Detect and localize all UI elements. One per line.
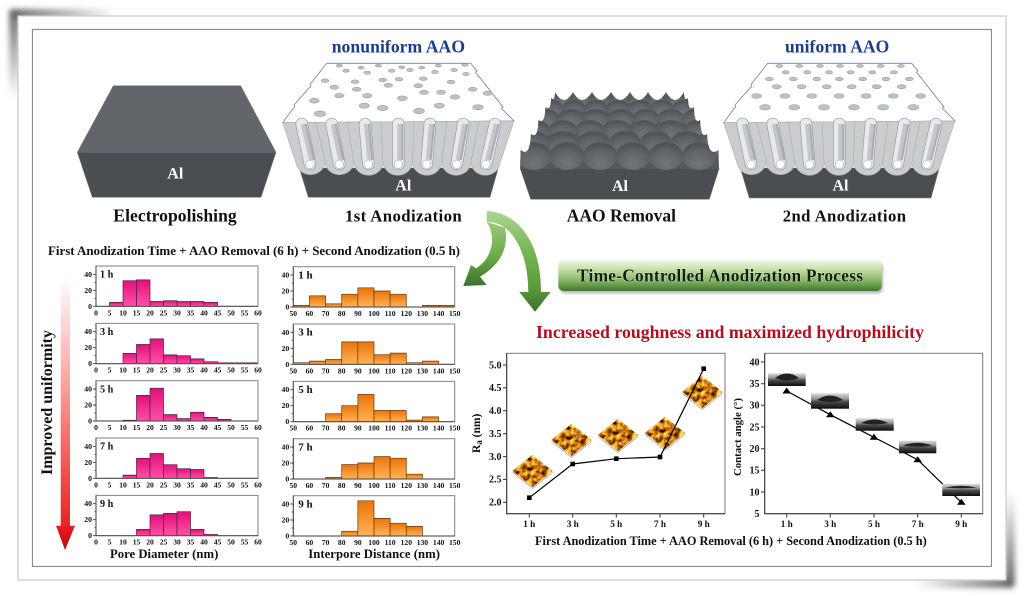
interpore distance histogram 7 h: 110: [385, 481, 396, 490]
interpore distance histogram 3 h: 90: [354, 366, 362, 375]
interpore distance histogram 3 h: 0: [285, 360, 289, 369]
pore diameter histogram 1 h: 40: [84, 270, 92, 279]
pore diameter histogram 9 h: 5: [108, 538, 112, 547]
line chart: contact angle: [732, 353, 983, 529]
pore diameter histogram 1 h: 35: [187, 308, 194, 317]
line chart: contact angle: 5 h: [868, 519, 880, 529]
line chart: contact angle: Contact angle (°): [732, 398, 744, 476]
interpore distance histogram 7 h: 100: [368, 481, 380, 490]
AFM surface images: [512, 376, 722, 488]
pore diameter histogram 5 h: 35: [187, 423, 194, 432]
interpore distance histogram 3 h: 40: [282, 328, 289, 337]
line chart: contact angle: 1 h: [781, 519, 793, 529]
interpore distance histogram 3 h: 70: [322, 366, 330, 375]
interpore distance histogram 3 h: 110: [385, 366, 396, 375]
pore diameter histogram 3 h: 20: [84, 343, 92, 352]
pore diameter histogram 7 h: 10: [119, 480, 127, 489]
interpore distance histogram 1 h: 90: [354, 309, 362, 318]
pore diameter histogram 7 h: 60: [254, 480, 262, 489]
pore diameter histogram 3 h: 15: [133, 366, 140, 375]
interpore distance histogram 9 h: 130: [417, 538, 428, 547]
interpore distance histogram 7 h: 70: [322, 481, 330, 490]
label: nonuniform AAO: nonuniform AAO: [332, 37, 465, 57]
pore diameter histogram 9 h: 55: [241, 538, 248, 547]
pore diameter histogram 7 h: 55: [241, 480, 248, 489]
water droplet images: [768, 373, 980, 496]
pore diameter histogram 1 h: 0: [88, 302, 92, 311]
interpore distance histogram 5 h: 90: [354, 424, 362, 433]
pore diameter histogram 9 h: 20: [146, 538, 154, 547]
pore diameter histogram 9 h: 25: [160, 538, 168, 547]
interpore distance histogram 5 h: 40: [282, 385, 289, 394]
line chart: roughness Ra: 1 h: [523, 519, 535, 529]
interpore distance histogram 1 h: 50: [290, 309, 297, 318]
pore diameter histogram 5 h: 0: [94, 423, 98, 432]
process banner: [558, 260, 883, 294]
pore diameter histogram 5 h: 30: [173, 423, 181, 432]
pore diameter histogram 5 h: 45: [214, 423, 222, 432]
block: second anodization uniform AAO: [724, 63, 955, 198]
line chart: roughness Ra: 2.5: [489, 475, 502, 486]
interpore distance histogram 3 h: 140: [433, 366, 444, 375]
pore diameter histogram 3 h: 50: [227, 366, 235, 375]
pore diameter histogram 3 h: 10: [119, 366, 127, 375]
pore diameter histogram 3 h: 3 h: [100, 327, 114, 338]
line chart: contact angle: 5: [754, 509, 760, 520]
pore diameter histogram 3 h: 30: [173, 366, 181, 375]
step label: AAO Removal: AAO Removal: [567, 206, 676, 226]
interpore distance histogram 5 h: 120: [401, 424, 412, 433]
histogram heading: First Anodization Time + AAO Removal (6 h) + Second Anodization (0.5 h): [48, 243, 460, 258]
line chart: roughness Ra: 9 h: [698, 519, 710, 529]
pore diameter histogram 1 h: 15: [133, 308, 140, 317]
line chart: roughness Ra: 3.5: [489, 429, 502, 440]
line chart: roughness Ra: R: [471, 445, 483, 453]
interpore distance histogram 9 h: 140: [433, 538, 444, 547]
line chart: roughness Ra: 4.5: [489, 383, 502, 394]
pore diameter histogram 3 h: 35: [187, 366, 194, 375]
pore diameter histogram 1 h: 0: [94, 308, 98, 317]
pore diameter histogram 1 h: 60: [254, 308, 262, 317]
interpore distance histogram 1 h: 20: [282, 286, 289, 296]
pore diameter histogram 1 h: 25: [160, 308, 168, 317]
interpore distance histogram 1 h: 1 h: [298, 269, 313, 281]
pore diameter histogram 7 h: 15: [133, 480, 140, 489]
pore diameter histogram 7 h: 20: [84, 458, 92, 467]
pore diameter histogram 5 h: 55: [241, 423, 248, 432]
pore diameter histogram 1 h: 40: [200, 308, 208, 317]
interpore distance histogram 1 h: 70: [322, 309, 330, 318]
interpore distance histogram 7 h: 0: [285, 474, 289, 484]
interpore distance histogram 7 h: 60: [306, 481, 313, 490]
interpore distance histogram 7 h: 20: [282, 458, 289, 468]
pore diameter histogram 5 h: [84, 381, 262, 432]
pore diameter histogram 7 h: 0: [94, 480, 98, 489]
pore diameter histogram 5 h: 25: [160, 423, 168, 432]
block: electropolished aluminium: [77, 86, 276, 197]
shared chart x-axis title: First Anodization Time + AAO Removal (6 h) + Second Anodization (0.5 h): [535, 534, 927, 548]
interpore distance histogram 9 h: 120: [401, 538, 412, 547]
interpore distance histogram 1 h: 110: [385, 309, 396, 318]
interpore distance histogram 7 h: 90: [354, 481, 362, 490]
interpore distance histogram 7 h: 150: [449, 481, 461, 490]
pore diameter histogram 9 h: 15: [133, 538, 140, 547]
line chart: contact angle: 25: [750, 422, 760, 433]
pore diameter histogram 5 h: 10: [119, 423, 127, 432]
line chart: contact angle: 30: [750, 401, 760, 412]
pore diameter histogram 9 h: [84, 495, 262, 547]
pore diameter histogram 9 h: 20: [84, 515, 92, 524]
line chart: contact angle: 15: [750, 466, 760, 477]
interpore distance histogram 3 h: 130: [417, 366, 428, 375]
pore diameter histogram 5 h: 15: [133, 423, 140, 432]
pore diameter histogram 7 h: 45: [214, 480, 222, 489]
line chart: roughness Ra: (nm): [471, 414, 483, 440]
pore diameter histogram 3 h: 5: [108, 366, 112, 375]
interpore distance histogram 1 h: 120: [401, 309, 412, 318]
pore diameter histogram 7 h: 25: [160, 480, 168, 489]
interpore distance histogram 9 h: 70: [322, 538, 330, 547]
pore diameter histogram 9 h: 0: [94, 538, 98, 547]
pore diameter histogram 1 h: 5: [108, 308, 112, 317]
interpore distance histogram 3 h: 100: [368, 366, 380, 375]
interpore distance histogram 1 h: 100: [368, 309, 380, 318]
interpore distance histogram 9 h: 150: [449, 538, 461, 547]
interpore distance histogram 1 h: 60: [306, 309, 313, 318]
interpore distance histogram 7 h: 7 h: [298, 441, 313, 453]
interpore distance histogram 5 h: 60: [306, 424, 313, 433]
label: improved uniformity: Improved uniformity: [39, 330, 56, 475]
pore diameter histogram 3 h: 25: [160, 366, 168, 375]
block: first anodization nonuniform AAO: Al: [395, 178, 412, 194]
interpore distance histogram 1 h: 40: [282, 270, 289, 280]
interpore distance histogram 9 h: 9 h: [298, 498, 313, 510]
line chart: contact angle: 20: [750, 444, 760, 455]
pore diameter histogram 3 h: 20: [146, 366, 154, 375]
pore diameter histogram 7 h: 40: [84, 442, 92, 451]
pore diameter histogram 3 h: 0: [94, 366, 98, 375]
interpore distance histogram 5 h: 130: [417, 424, 428, 433]
step label: 1st Anodization: 1st Anodization: [345, 207, 462, 226]
block: second anodization uniform AAO: Al: [832, 178, 849, 194]
block: first anodization nonuniform AAO: [283, 63, 514, 197]
pore diameter histogram 9 h: 40: [200, 538, 208, 547]
interpore distance histogram 5 h: 140: [433, 424, 444, 433]
line chart: roughness Ra: 3.0: [489, 452, 502, 463]
pore diameter histogram 3 h: 55: [241, 366, 248, 375]
pore diameter histogram 1 h: 10: [119, 308, 127, 317]
interpore distance histogram 9 h: 60: [306, 538, 313, 547]
interpore distance histogram 7 h: 120: [401, 481, 412, 490]
axis title: interpore distance: Interpore Distance (nm): [308, 547, 440, 561]
pore diameter histogram 7 h: [84, 438, 262, 489]
step label: Electropolishing: Electropolishing: [113, 206, 237, 226]
interpore distance histogram 3 h: 120: [401, 366, 412, 375]
interpore distance histogram 5 h: 150: [449, 424, 461, 433]
arrow: green curved to charts: [487, 211, 551, 312]
arrow: improved uniformity gradient: [56, 276, 75, 550]
interpore distance histogram 7 h: 130: [417, 481, 428, 490]
line chart: roughness Ra: a: [474, 440, 484, 445]
interpore distance histogram 1 h: 150: [449, 309, 461, 318]
interpore distance histogram 9 h: 90: [354, 538, 362, 547]
label: uniform AAO: uniform AAO: [785, 37, 889, 57]
pore diameter histogram 1 h: [84, 266, 262, 317]
interpore distance histogram 7 h: 140: [433, 481, 444, 490]
line chart: contact angle: 3 h: [824, 519, 836, 529]
pore diameter histogram 9 h: 60: [254, 538, 262, 547]
interpore distance histogram 1 h: [282, 267, 461, 318]
interpore distance histogram 5 h: 100: [368, 424, 380, 433]
interpore distance histogram 5 h: 80: [338, 424, 346, 433]
interpore distance histogram 7 h: [282, 439, 461, 490]
line chart: contact angle: 40: [750, 357, 760, 368]
pore diameter histogram 5 h: 40: [84, 384, 92, 394]
line chart: contact angle: 10: [750, 487, 760, 498]
interpore distance histogram 3 h: 3 h: [298, 327, 313, 339]
pore diameter histogram 1 h: 20: [146, 308, 154, 317]
interpore distance histogram 3 h: 80: [338, 366, 346, 375]
pore diameter histogram 1 h: 30: [173, 308, 181, 317]
pore diameter histogram 9 h: 35: [187, 538, 194, 547]
line chart: contact angle: 35: [750, 379, 760, 390]
pore diameter histogram 3 h: 60: [254, 366, 262, 375]
interpore distance histogram 1 h: 140: [433, 309, 444, 318]
axis title: pore diameter: Pore Diameter (nm): [110, 547, 218, 561]
interpore distance histogram 5 h: 5 h: [298, 384, 313, 396]
pore diameter histogram 3 h: 40: [200, 366, 208, 375]
pore diameter histogram 7 h: 5: [108, 480, 112, 489]
interpore distance histogram 7 h: 50: [290, 481, 297, 490]
interpore distance histogram 9 h: 100: [368, 538, 380, 547]
pore diameter histogram 5 h: 5: [108, 423, 112, 432]
pore diameter histogram 7 h: 35: [187, 480, 194, 489]
pore diameter histogram 1 h: 55: [241, 308, 248, 317]
line chart: contact angle: 9 h: [955, 519, 967, 529]
pore diameter histogram 3 h: 0: [88, 359, 92, 368]
results heading: Increased roughness and maximized hydrophilicity: [536, 322, 924, 342]
pore diameter histogram 1 h: 45: [214, 308, 222, 317]
block: electropolished aluminium: Al: [167, 166, 184, 182]
pore diameter histogram 5 h: 40: [200, 423, 208, 432]
line chart: roughness Ra: 5 h: [610, 519, 622, 529]
pore diameter histogram 9 h: 40: [84, 499, 92, 508]
line chart: roughness Ra: 7 h: [654, 519, 666, 529]
interpore distance histogram 5 h: 70: [322, 424, 330, 433]
pore diameter histogram 1 h: 1 h: [100, 270, 114, 281]
interpore distance histogram 1 h: 0: [285, 302, 289, 312]
interpore distance histogram 9 h: 80: [338, 538, 346, 547]
interpore distance histogram 9 h: 0: [285, 532, 289, 540]
block: AAO removal dimpled aluminium: [515, 90, 728, 199]
interpore distance histogram 1 h: 80: [338, 309, 346, 318]
interpore distance histogram 3 h: 20: [282, 344, 289, 353]
arrow: green curved to histograms: [463, 222, 506, 286]
interpore distance histogram 9 h: 20: [282, 516, 289, 524]
interpore distance histogram 3 h: [282, 324, 461, 375]
pore diameter histogram 3 h: 40: [84, 327, 92, 336]
pore diameter histogram 7 h: 0: [88, 474, 92, 483]
interpore distance histogram 1 h: 130: [417, 309, 428, 318]
interpore distance histogram 5 h: 20: [282, 401, 289, 410]
interpore distance histogram 7 h: 40: [282, 442, 289, 452]
interpore distance histogram 5 h: 110: [385, 424, 396, 433]
pore diameter histogram 5 h: 0: [88, 416, 92, 426]
pore diameter histogram 9 h: 30: [173, 538, 181, 547]
pore diameter histogram 1 h: 20: [84, 286, 92, 295]
pore diameter histogram 5 h: 60: [254, 423, 262, 432]
interpore distance histogram 3 h: 60: [306, 366, 313, 375]
pore diameter histogram 5 h: 5 h: [100, 384, 114, 395]
interpore distance histogram 9 h: [282, 496, 461, 547]
interpore distance histogram 5 h: [282, 381, 461, 433]
line chart: roughness Ra: [471, 353, 725, 529]
pore diameter histogram 5 h: 50: [227, 423, 235, 432]
line chart: roughness Ra: 5.0: [489, 360, 502, 371]
line chart: roughness Ra: 2.0: [489, 498, 502, 509]
pore diameter histogram 9 h: 9 h: [100, 499, 114, 510]
pore diameter histogram 7 h: 7 h: [100, 442, 114, 453]
pore diameter histogram 3 h: 45: [214, 366, 222, 375]
pore diameter histogram 7 h: 50: [227, 480, 235, 489]
pore diameter histogram 5 h: 20: [146, 423, 154, 432]
line chart: roughness Ra: 3 h: [567, 519, 579, 529]
step label: 2nd Anodization: 2nd Anodization: [783, 207, 907, 226]
pore diameter histogram 7 h: 30: [173, 480, 181, 489]
pore diameter histogram 7 h: 40: [200, 480, 208, 489]
interpore distance histogram 5 h: 50: [290, 424, 297, 433]
interpore distance histogram 3 h: 50: [290, 366, 297, 375]
interpore distance histogram 9 h: 110: [385, 538, 396, 547]
line chart: contact angle: 7 h: [912, 519, 924, 529]
pore diameter histogram 9 h: 10: [119, 538, 127, 547]
pore diameter histogram 3 h: [84, 323, 262, 375]
block: AAO removal dimpled aluminium: Al: [612, 178, 629, 195]
interpore distance histogram 9 h: 50: [290, 538, 297, 547]
pore diameter histogram 1 h: 50: [227, 308, 235, 317]
interpore distance histogram 3 h: 150: [449, 366, 461, 375]
interpore distance histogram 9 h: 40: [282, 500, 289, 508]
pore diameter histogram 9 h: 45: [214, 538, 222, 547]
pore diameter histogram 9 h: 0: [88, 531, 92, 540]
interpore distance histogram 5 h: 0: [285, 417, 289, 426]
pore diameter histogram 9 h: 50: [227, 538, 235, 547]
line chart: roughness Ra: 4.0: [489, 406, 502, 417]
pore diameter histogram 5 h: 20: [84, 400, 92, 410]
interpore distance histogram 7 h: 80: [338, 481, 346, 490]
pore diameter histogram 7 h: 20: [146, 480, 154, 489]
process banner: Time-Controlled Anodization Process: [577, 266, 863, 286]
